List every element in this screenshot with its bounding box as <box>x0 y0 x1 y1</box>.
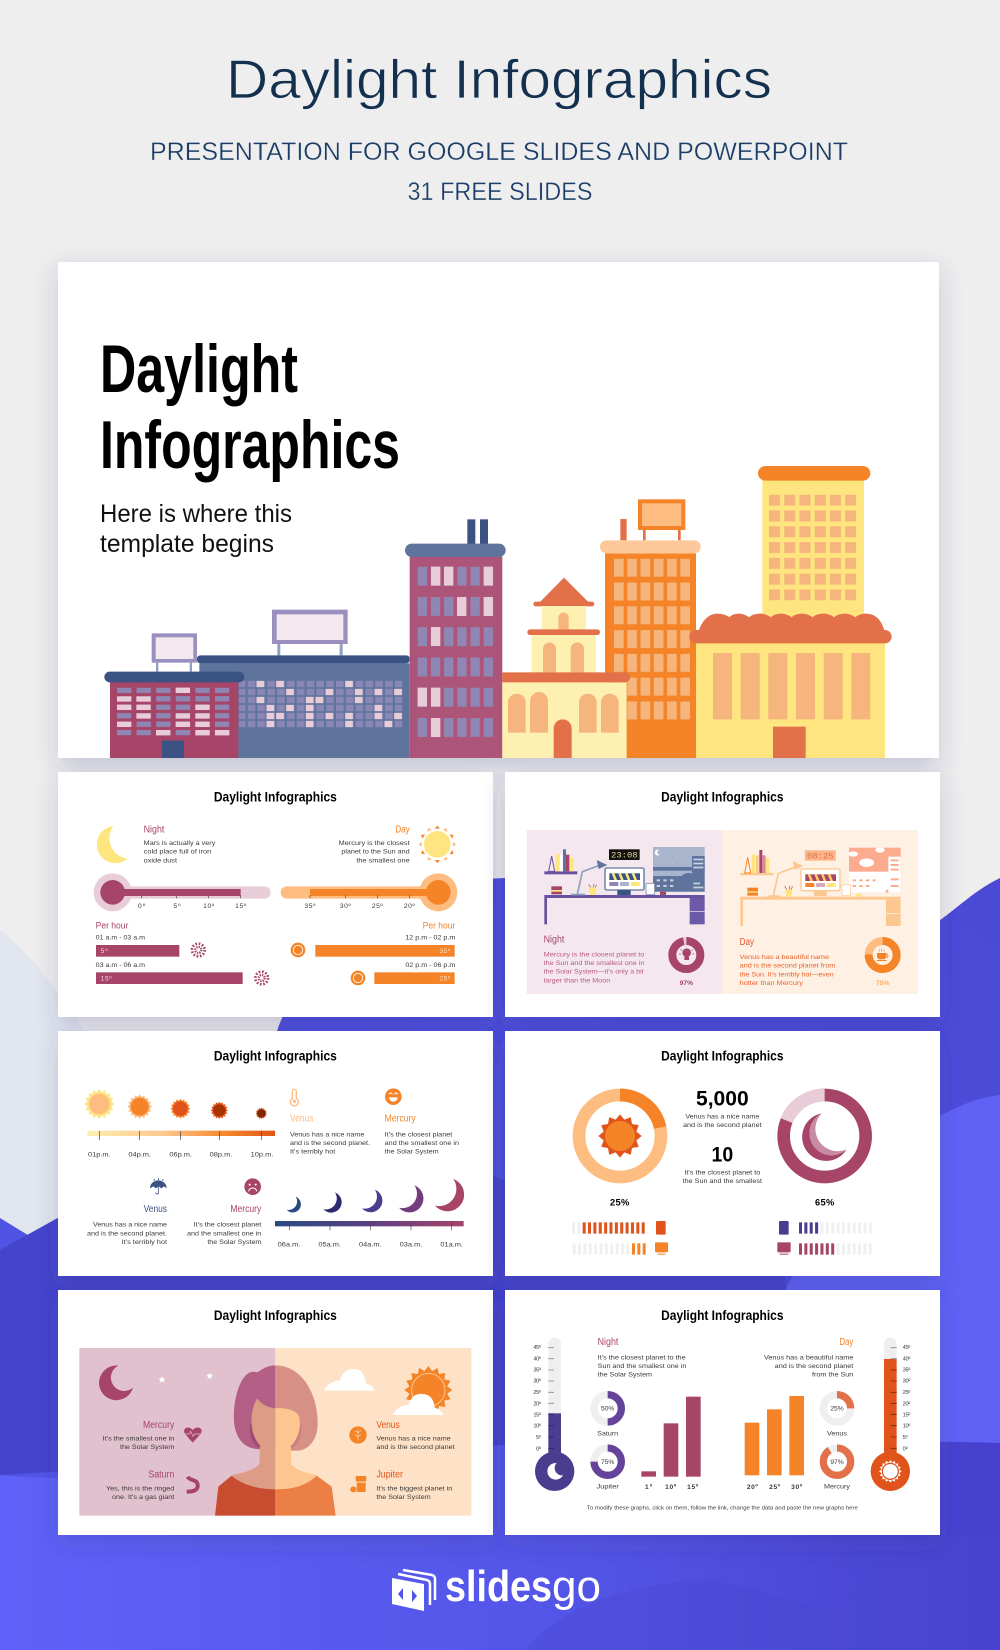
night per hour bars: 01 a.m - 03 a.m <box>96 934 145 941</box>
day background <box>275 1348 471 1516</box>
icon: umbrella <box>150 1178 167 1194</box>
day text: hotter than Mercury <box>740 980 804 987</box>
day thermometer: 25º <box>372 903 383 910</box>
stat: 5,000 <box>683 1086 762 1129</box>
saturn text <box>106 1470 175 1501</box>
day thermometer: 20º <box>404 903 415 910</box>
donut: moon 65% <box>784 1095 866 1208</box>
day text: Venus has a beautiful name <box>764 1354 854 1361</box>
icon: sun and clouds <box>324 1366 452 1415</box>
day text <box>764 1337 854 1379</box>
venus text: Venus has a nice name <box>376 1435 451 1442</box>
day thermometer: 35º <box>903 1367 910 1374</box>
night thermometer: 0º <box>536 1445 541 1452</box>
bar chart: day: 30º <box>791 1484 803 1491</box>
icon: logo cards <box>392 1570 435 1611</box>
day thermometer: 45º <box>903 1344 910 1351</box>
panel: slide charts <box>505 1290 940 1535</box>
night text: Mercury is the closest planet to <box>544 951 645 958</box>
day thermometer: 40º <box>903 1355 910 1362</box>
bar chart: day: 25º <box>769 1484 781 1491</box>
mercury night text <box>187 1204 262 1246</box>
night text: the Sun and the smallest one in <box>544 960 645 967</box>
mercury text: Mercury <box>385 1114 416 1125</box>
slide title: Daylight Infographics <box>661 1048 784 1064</box>
jupiter text: Jupiter <box>376 1470 404 1481</box>
main title: Daylight Infographics <box>226 48 772 110</box>
stat: 5,000: Venus has a nice name <box>685 1113 760 1120</box>
night thermometer: 10º <box>533 1423 541 1430</box>
day text: Mercury is the closest <box>339 840 410 847</box>
night text: the Solar System—it's only a bit <box>544 969 644 976</box>
day text: from the Sun <box>812 1372 854 1379</box>
night thermometer: 10º <box>203 903 215 910</box>
icon: brain <box>349 1426 367 1444</box>
donut: jupiter: 75% <box>601 1459 614 1466</box>
day thermometer: 35º <box>304 903 316 910</box>
night thermometer: 0º <box>138 903 146 910</box>
day timeline: 06p.m. <box>169 1152 192 1159</box>
day text <box>339 824 410 864</box>
icon: sad face <box>244 1178 261 1195</box>
night text <box>544 934 645 984</box>
donut: saturn: 50% <box>601 1406 614 1413</box>
panel: slide donuts <box>505 1031 940 1276</box>
night timeline: 01a.m. <box>440 1242 463 1249</box>
donut: sun 25% <box>579 1095 661 1208</box>
night text <box>144 824 216 864</box>
icon: thermometer <box>290 1089 298 1106</box>
night text: It's the closest planet to the <box>598 1354 686 1361</box>
venus text: and is the second planet <box>376 1444 455 1451</box>
day text: Day <box>839 1337 853 1348</box>
bar chart: night: 15º <box>687 1484 699 1491</box>
day timeline: 08p.m. <box>210 1152 232 1159</box>
day text: Day <box>395 824 410 835</box>
stat: 10: It's the closest planet to <box>684 1169 761 1176</box>
mercury text: and the smallest one in <box>385 1140 459 1147</box>
bar chart: night: 10º <box>665 1484 677 1491</box>
building: crimson tower <box>405 519 506 758</box>
night thermometer <box>94 873 271 911</box>
night timeline: 05a.m. <box>318 1242 341 1249</box>
day per hour bars: Per hour <box>423 921 455 931</box>
day per hour bars: 12 p.m - 02 p.m <box>405 934 456 941</box>
building: crimson low block <box>104 633 244 758</box>
donut: jupiter: Jupiter <box>596 1484 620 1491</box>
bar chart: night <box>641 1397 701 1491</box>
day thermometer: 15º <box>903 1411 910 1418</box>
donut: saturn: Saturn <box>597 1430 618 1437</box>
hero heading <box>100 331 400 483</box>
night text: larger than the Moon <box>544 977 611 984</box>
bar chart: day <box>745 1396 804 1491</box>
night thermometer: 40º <box>533 1355 541 1362</box>
logo: slidesgo <box>392 1562 601 1611</box>
donut: 97%: 97% <box>680 980 693 987</box>
icon: pills <box>350 1476 366 1492</box>
venus text: and is the second planet. <box>290 1140 370 1147</box>
saturn text: Yes, this is the ringed <box>106 1485 175 1492</box>
day thermometer: 25º <box>903 1389 910 1396</box>
donut: moon 65%: 65% <box>815 1198 835 1208</box>
donut: mercury: 97% <box>830 1459 844 1466</box>
slide title: Daylight Infographics <box>214 1307 337 1323</box>
mercury text <box>385 1114 459 1156</box>
donut: venus: Venus <box>827 1430 848 1437</box>
venus night text: Venus has a nice name <box>93 1222 167 1229</box>
night thermometer: 20º <box>533 1400 541 1407</box>
night thermometer <box>533 1338 574 1491</box>
slide title: Daylight Infographics <box>661 1307 784 1323</box>
saturn text: one. It's a gas giant <box>112 1494 174 1501</box>
saturn text: Saturn <box>148 1470 174 1481</box>
icon: moon <box>97 826 128 863</box>
night thermometer: 35º <box>533 1367 541 1374</box>
day thermometer: 0º <box>903 1445 908 1452</box>
night text: Night <box>544 934 565 945</box>
night per hour bars: 5º <box>101 948 108 955</box>
illustration: night desk <box>544 847 705 924</box>
illustration: day desk: 08:25 <box>807 852 834 861</box>
day per hour bars: 25º <box>439 975 451 982</box>
day panel <box>722 830 918 994</box>
panel: slide thermometers <box>58 772 493 1017</box>
night panel <box>527 830 722 994</box>
night timeline: 06a.m. <box>278 1242 300 1249</box>
illustration: day desk <box>740 847 901 926</box>
night timeline <box>275 1221 464 1249</box>
bar chart: day: 20º <box>747 1484 758 1491</box>
day text: Venus has a beautiful name <box>740 954 829 961</box>
day per hour bars: 35º <box>439 948 451 955</box>
night thermometer: 5º <box>536 1434 541 1441</box>
slide title: Daylight Infographics <box>214 789 337 805</box>
icon: moon with stars <box>99 1366 213 1400</box>
illustration: right buildings <box>502 466 892 758</box>
donut: venus <box>823 1395 851 1437</box>
icon: sun <box>419 826 456 863</box>
subtitle <box>150 138 848 206</box>
night thermometer: 25º <box>533 1389 541 1396</box>
icon: stomach <box>187 1477 198 1492</box>
logo wordmark: go <box>552 1562 601 1611</box>
subtitle: PRESENTATION FOR GOOGLE SLIDES AND POWERPOINT <box>150 138 848 166</box>
night per hour bars: 03 a.m - 06 a.m <box>96 962 145 969</box>
donut: 97% <box>672 941 700 987</box>
day thermometer <box>871 1338 910 1491</box>
mercury night text: the Solar System <box>207 1239 262 1246</box>
night timeline: 04a.m. <box>359 1242 382 1249</box>
night per hour bars: 15º <box>101 975 112 982</box>
mercury text: It's the smallest one in <box>103 1435 175 1442</box>
progress bars: left <box>572 1221 668 1255</box>
night text: cold place full of iron <box>144 849 212 856</box>
jupiter text: the Solar System <box>376 1494 431 1501</box>
night thermometer: 15º <box>235 903 247 910</box>
stat: 10: the Sun and the smallest <box>683 1178 762 1185</box>
venus text: Venus <box>376 1420 400 1431</box>
night text: Night <box>598 1337 619 1348</box>
night timeline: 03a.m. <box>400 1242 422 1249</box>
day thermometer: 30º <box>903 1378 910 1385</box>
day thermometer <box>281 873 457 911</box>
panel: slide portrait <box>58 1290 493 1535</box>
day thermometer: 20º <box>903 1400 910 1407</box>
donut: jupiter <box>594 1448 621 1491</box>
day text: the Sun. It's terribly hot—even <box>740 971 834 978</box>
jupiter text: It's the biggest planet in <box>376 1485 453 1492</box>
stat: 5,000: and is the second planet <box>683 1122 762 1129</box>
panel: slide timelines <box>58 1031 493 1276</box>
building: orange tower <box>600 499 701 758</box>
donut: venus: 25% <box>830 1406 844 1413</box>
day text: planet to the Sun and <box>341 849 410 856</box>
progress bars: right <box>777 1221 872 1255</box>
mercury text: the Solar System <box>120 1444 175 1451</box>
night thermometer: 5º <box>173 903 181 910</box>
day thermometer: 30º <box>340 903 351 910</box>
mercury text: It's the closest planet <box>385 1131 452 1138</box>
day text: and is the second planet from <box>740 963 836 970</box>
day text: and is the second planet <box>775 1363 853 1370</box>
building: yellow hall <box>689 614 892 758</box>
night text: the Solar System <box>598 1372 652 1379</box>
day timeline: 01p.m. <box>88 1152 111 1159</box>
night per hour bars <box>96 921 268 984</box>
building: blue low block <box>197 610 410 758</box>
donut: 75%: 75% <box>876 980 889 987</box>
building: yellow tower <box>758 466 870 620</box>
night text: Night <box>144 824 165 835</box>
venus night text: It's terribly hot <box>122 1239 167 1246</box>
donut: sun 25%: 25% <box>610 1198 630 1208</box>
day timeline: 10p.m. <box>251 1152 273 1159</box>
day per hour bars: 02 p.m - 06 p.m <box>405 962 456 969</box>
night text: oxide dust <box>144 857 177 864</box>
night thermometer: 45º <box>533 1344 541 1351</box>
night thermometer: 30º <box>533 1378 541 1385</box>
jupiter text <box>376 1470 453 1501</box>
venus night text: Venus <box>144 1204 167 1215</box>
night text <box>598 1337 687 1379</box>
illustration: left buildings <box>104 519 506 758</box>
panel: slide desks <box>505 772 940 1017</box>
mercury night text: It's the closest planet <box>194 1222 261 1229</box>
hero subheading: Here is where this <box>100 500 292 528</box>
donut: mercury: Mercury <box>824 1484 851 1491</box>
stat: 10 <box>683 1143 762 1185</box>
footnote: To modify these graphs, click on them, follow the link, change the data and paste the new graphs here <box>587 1506 858 1512</box>
mercury night text: Mercury <box>230 1204 261 1215</box>
day text: the smallest one <box>356 857 410 864</box>
venus text <box>290 1114 370 1156</box>
venus text: Venus <box>290 1114 313 1125</box>
night thermometer: 15º <box>533 1411 541 1418</box>
venus text <box>376 1420 455 1451</box>
illustration: night desk: 23:08 <box>611 851 638 860</box>
bar chart: night: 1º <box>645 1484 653 1491</box>
building: cream house with tower <box>502 578 630 758</box>
illustration: woman portrait <box>215 1365 336 1516</box>
donut: mercury <box>823 1448 851 1491</box>
hero heading: Daylight <box>100 331 298 407</box>
hero subheading: template begins <box>100 530 274 558</box>
day timeline: 04p.m. <box>128 1152 151 1159</box>
subtitle: 31 FREE SLIDES <box>408 178 592 206</box>
panel: hero slide <box>58 262 939 758</box>
day per hour bars <box>291 921 456 985</box>
mercury text: Mercury <box>143 1420 174 1431</box>
mercury text <box>103 1420 175 1451</box>
night text: Sun and the smallest one in <box>598 1363 687 1370</box>
stat: 5,000: 5,000 <box>696 1086 749 1110</box>
hero subheading <box>100 500 292 558</box>
day timeline <box>87 1131 275 1159</box>
night per hour bars: Per hour <box>96 921 128 931</box>
venus night text: and is the second planet. <box>87 1230 167 1237</box>
venus night text <box>87 1204 167 1246</box>
hero heading: Infographics <box>100 407 400 483</box>
stat: 10: 10 <box>711 1143 733 1167</box>
slide title: Daylight Infographics <box>661 789 784 805</box>
mercury text: the Solar System <box>385 1149 439 1156</box>
donut: 75% <box>869 941 897 987</box>
icon: smile <box>385 1088 402 1105</box>
slide title: Daylight Infographics <box>214 1048 337 1064</box>
icons: moons <box>287 1179 464 1213</box>
night background <box>79 1348 275 1516</box>
venus text: Venus has a nice name <box>290 1131 365 1138</box>
icon: heart <box>184 1428 202 1443</box>
night text: Mars is actually a very <box>144 840 216 847</box>
logo wordmark: slides <box>445 1562 552 1611</box>
day thermometer: 10º <box>903 1423 910 1430</box>
day text <box>740 937 836 987</box>
icons: suns <box>84 1089 267 1119</box>
day text: Day <box>740 937 754 948</box>
donut: saturn <box>594 1395 621 1437</box>
mercury night text: and the smallest one in <box>187 1230 262 1237</box>
day thermometer: 5º <box>903 1434 908 1441</box>
venus text: It's terribly hot <box>290 1149 335 1156</box>
